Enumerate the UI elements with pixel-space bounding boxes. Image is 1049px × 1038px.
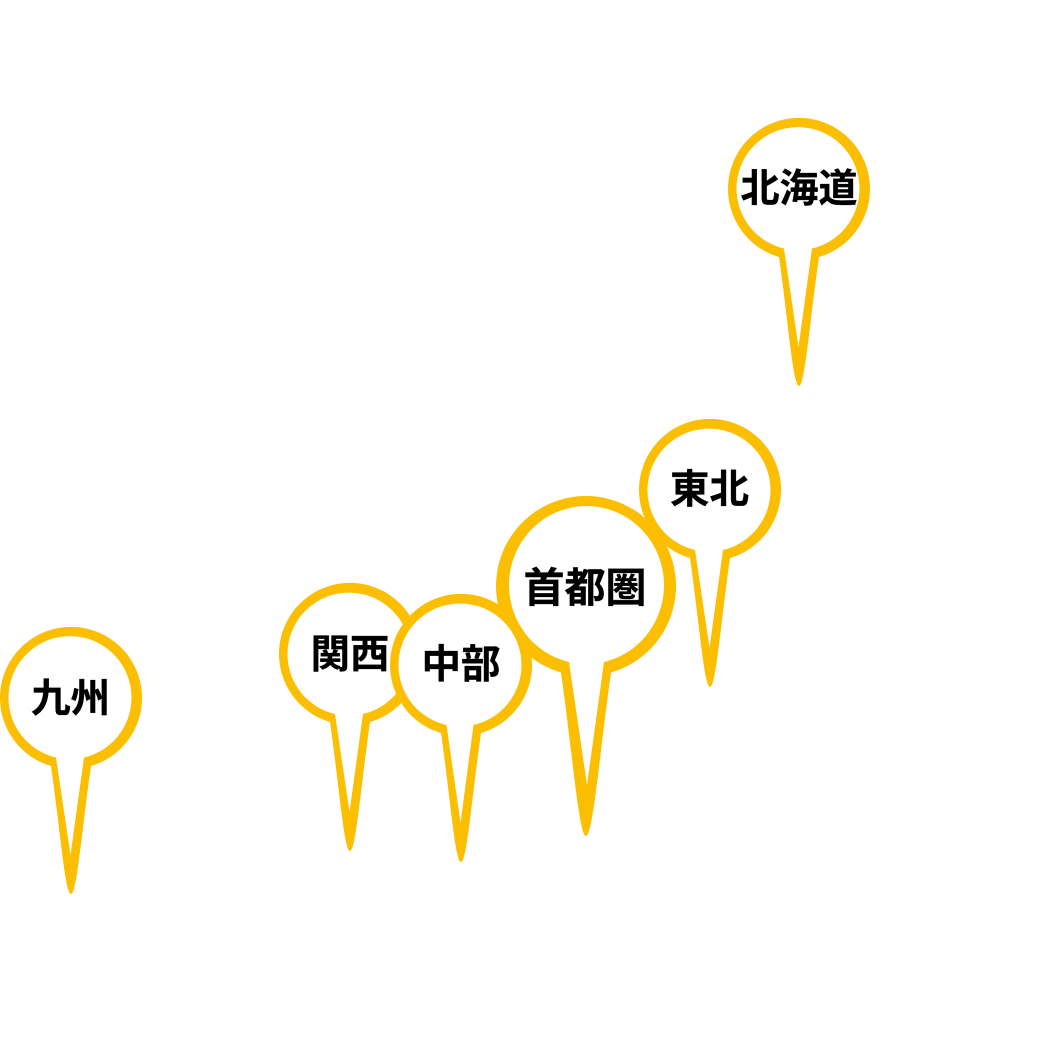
pin: 関西: [279, 583, 421, 851]
pin: 首都圏: [496, 496, 676, 836]
pin: 中部: [390, 594, 532, 862]
pin: 首都圏: 首都圏: [524, 565, 646, 611]
pin: 東北: [639, 419, 781, 687]
pin: 九州: 九州: [31, 677, 110, 721]
pin: 東北: 東北: [670, 468, 749, 512]
pin: 北海道: 北海道: [740, 168, 858, 211]
pin: 九州: [0, 627, 142, 894]
pin: 関西: 関西: [310, 633, 390, 677]
pin: 中部: 中部: [422, 643, 500, 687]
pin: 北海道: [728, 118, 870, 386]
